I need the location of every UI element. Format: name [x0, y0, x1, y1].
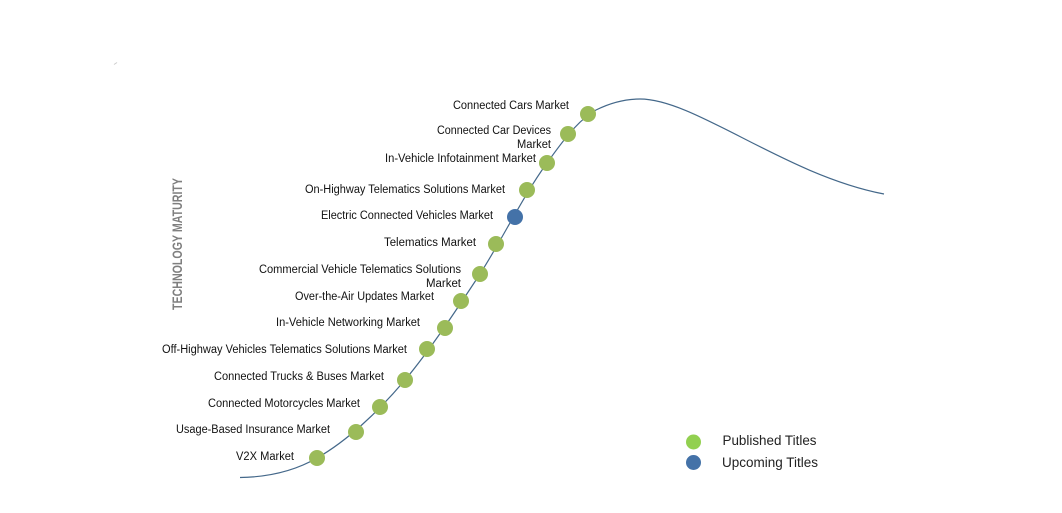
point: Telematics Market: Telematics Market [384, 237, 477, 249]
point: Connected Car Devices Market: Market [517, 139, 552, 151]
point: Off-Highway Vehicles Telematics Solutions Market: Off-Highway Vehicles Telematics Solutions Market [162, 344, 408, 356]
point: In-Vehicle Infotainment Market [385, 153, 555, 171]
market points [162, 100, 596, 466]
point: In-Vehicle Networking Market [276, 317, 453, 336]
point: On-Highway Telematics Solutions Market: On-Highway Telematics Solutions Market [305, 184, 506, 196]
legend item: published titles: Published Titles [722, 433, 817, 448]
point: Commercial Vehicle Telematics Solutions Market: Commercial Vehicle Telematics Solutions [259, 264, 461, 276]
point: Usage-Based Insurance Market [176, 424, 364, 440]
point: Usage-Based Insurance Market: Usage-Based Insurance Market [176, 424, 331, 436]
point: Connected Motorcycles Market: Connected Motorcycles Market [208, 398, 361, 410]
faint mark [114, 62, 117, 64]
point: Connected Trucks &amp; Buses Market [214, 371, 413, 388]
point: Connected Cars Market: Connected Cars Market [453, 100, 570, 112]
point: V2X Market: V2X Market [236, 451, 295, 463]
point: In-Vehicle Networking Market: In-Vehicle Networking Market [276, 317, 421, 329]
point: Connected Cars Market [453, 100, 596, 122]
point: Connected Car Devices Market [437, 125, 576, 151]
point: Over-the-Air Updates Market [295, 291, 469, 309]
point: In-Vehicle Infotainment Market: In-Vehicle Infotainment Market [385, 153, 537, 165]
point: Connected Trucks &amp; Buses Market: Connected Trucks & Buses Market [214, 371, 385, 383]
legend [686, 433, 818, 470]
point: Electric Connected Vehicles Market: Electric Connected Vehicles Market [321, 210, 494, 222]
point: Over-the-Air Updates Market: Over-the-Air Updates Market [295, 291, 435, 303]
point: On-Highway Telematics Solutions Market [305, 182, 535, 198]
point: V2X Market [236, 450, 325, 466]
point: Connected Motorcycles Market [208, 398, 388, 415]
point: Telematics Market [384, 236, 504, 252]
legend item: upcoming titles: Upcoming Titles [722, 455, 818, 470]
point: Electric Connected Vehicles Market [321, 209, 523, 225]
point: Connected Car Devices Market: Connected Car Devices [437, 125, 551, 137]
maturity curve [240, 99, 884, 478]
axis label: technology maturity: TECHNOLOGY MATURITY [169, 177, 185, 310]
point: Commercial Vehicle Telematics Solutions Market: Market [426, 278, 462, 290]
point: Commercial Vehicle Telematics Solutions Market [259, 264, 488, 290]
